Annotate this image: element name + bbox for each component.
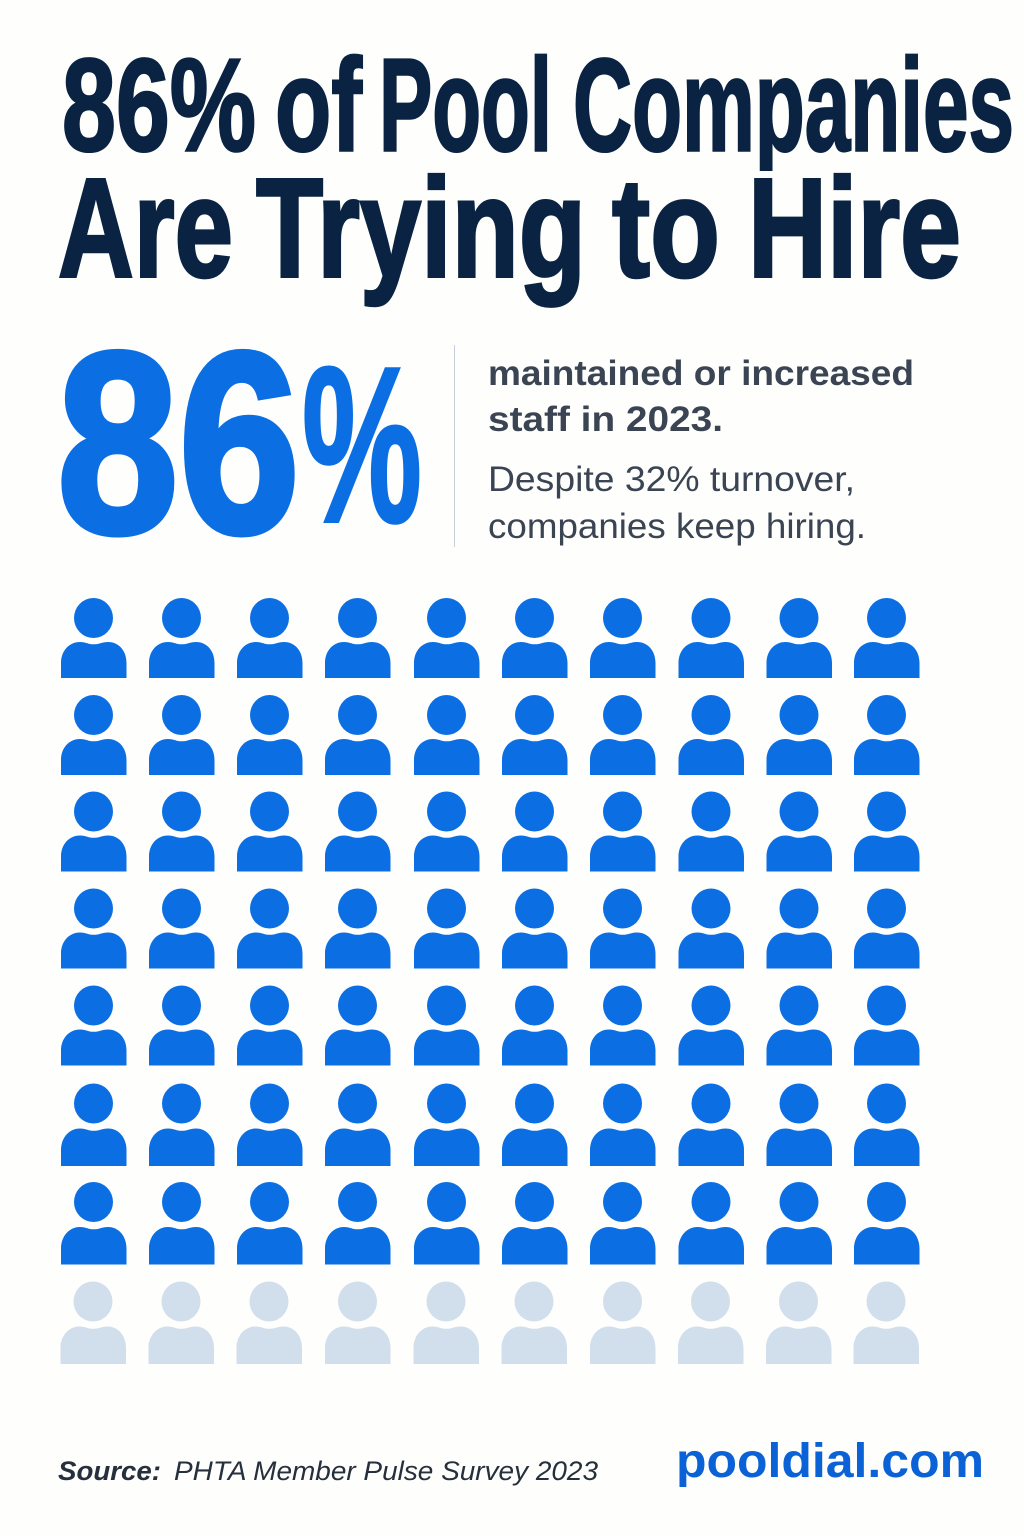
divider — [454, 345, 455, 547]
title line 1 — [64, 54, 1012, 171]
highlighted people rows — [61, 598, 920, 1264]
stat description — [488, 354, 914, 546]
source note: PHTA Member Pulse Survey 2023 — [174, 1456, 598, 1486]
stat description: staff in 2023. — [488, 400, 723, 439]
muted people row — [60, 1282, 919, 1364]
stat description: Despite 32% turnover, — [488, 460, 855, 499]
title line 2 — [58, 148, 961, 306]
title line 2: to — [612, 148, 720, 306]
source note: Source: — [58, 1456, 161, 1486]
title line 2: Trying — [256, 148, 586, 306]
big stat: 86%: 86 — [57, 298, 300, 587]
stat description: maintained or increased — [488, 354, 914, 393]
title line 2: Hire — [748, 148, 961, 306]
stat description: companies keep hiring. — [488, 507, 866, 546]
big stat: 86%: % — [302, 322, 422, 570]
pictogram: 70 of 80 people highlighted — [60, 598, 920, 1364]
title — [58, 32, 1014, 306]
title line 1: of — [275, 32, 363, 178]
title line 1: Pool — [379, 32, 552, 178]
brand: pooldial.com: pooldial.com — [676, 1435, 984, 1488]
title line 1: 86% — [62, 32, 256, 178]
title line 2: Are — [58, 148, 233, 306]
